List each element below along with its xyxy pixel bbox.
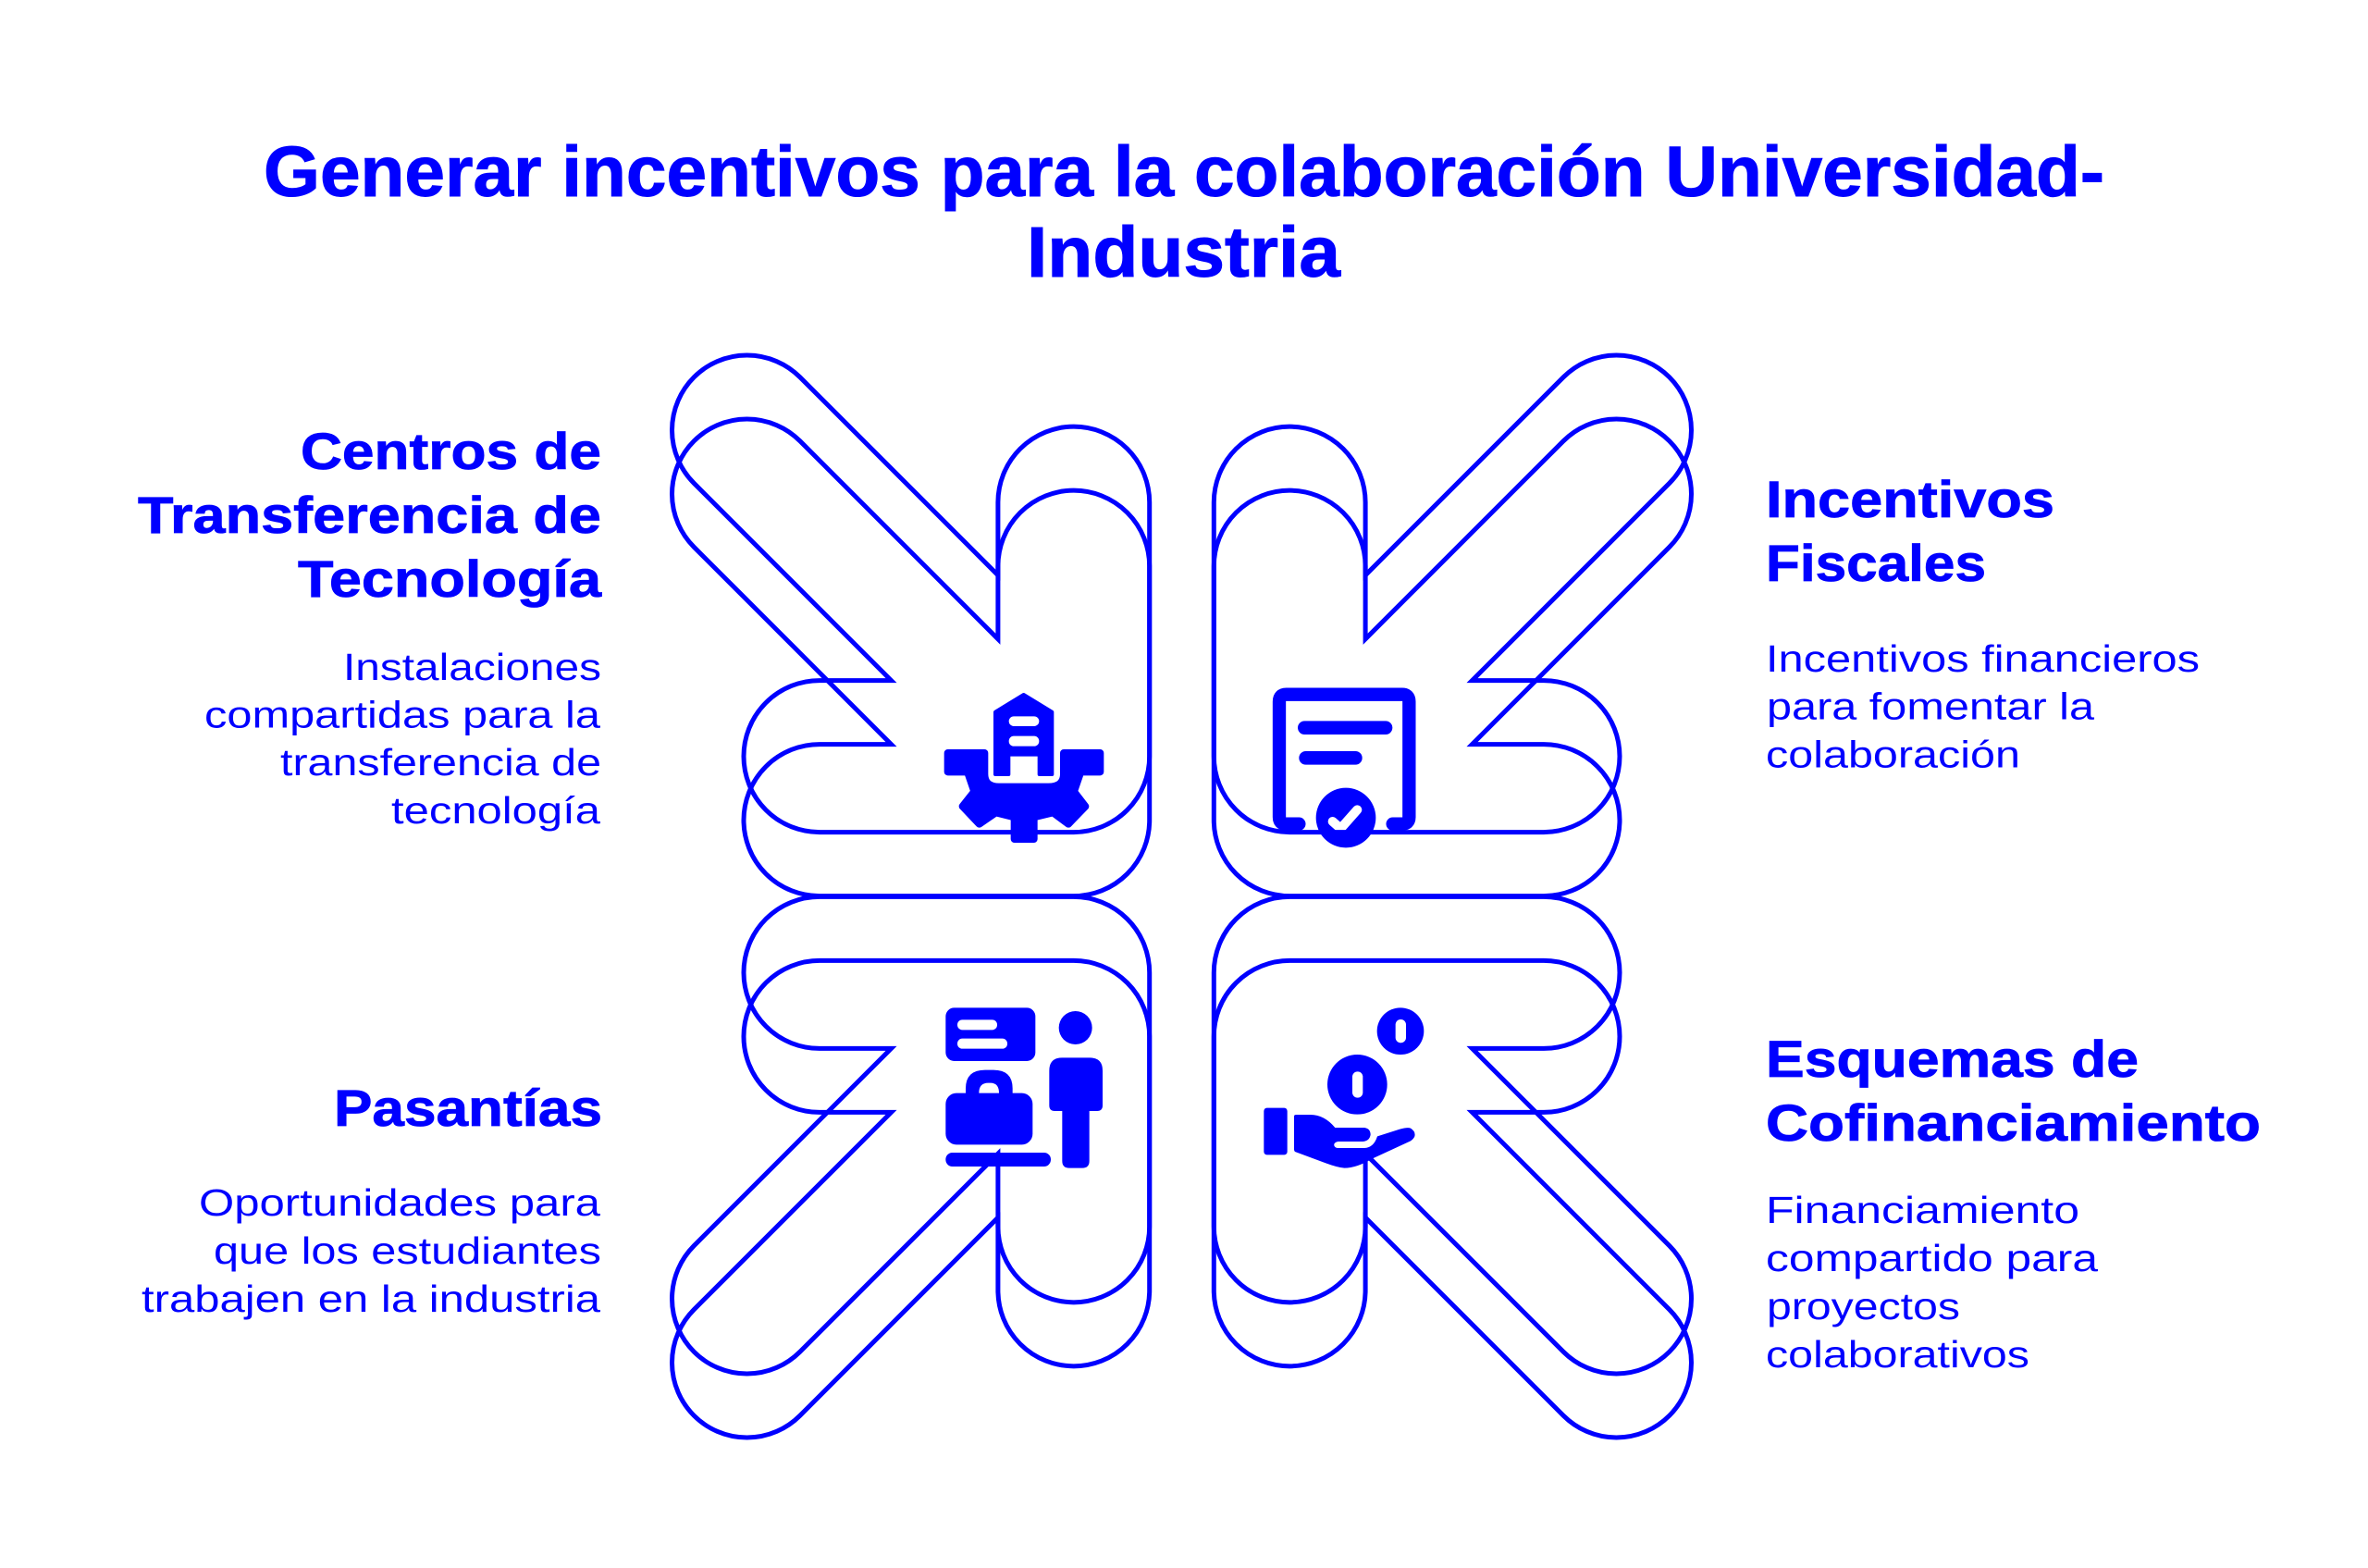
arrow outline: top-right xyxy=(1214,355,1691,896)
description: Esquemas de Cofinanciamiento: Financiamiento xyxy=(1766,1189,2079,1231)
heading: Centros de Transferencia de Tecnología xyxy=(138,422,602,608)
icon: building on gear xyxy=(948,695,1100,839)
panel: top-right arrow, Incentivos Fiscales xyxy=(1214,355,1691,896)
heading: Incentivos Fiscales: Fiscales xyxy=(1766,534,1986,592)
heading: Esquemas de Cofinanciamiento: Cofinanciamiento xyxy=(1766,1093,2261,1152)
description: Centros de Transferencia de Tecnología: compartidas para la xyxy=(204,694,600,736)
description: Esquemas de Cofinanciamiento: compartido para xyxy=(1766,1237,2098,1279)
arrow outline: bottom-right xyxy=(1214,896,1691,1438)
panel: bottom-left arrow, Pasantías xyxy=(672,896,1150,1438)
panel: bottom-right arrow, Esquemas de Cofinanciamiento xyxy=(1214,896,1691,1438)
description: Centros de Transferencia de Tecnología: transferencia de xyxy=(280,741,601,784)
heading: Incentivos Fiscales: Incentivos xyxy=(1766,470,2054,528)
heading: Incentivos Fiscales xyxy=(1766,470,2054,592)
panel: top-left arrow, Centros de Transferencia de Tecnología xyxy=(672,355,1150,896)
description: Pasantías: trabajen en la industria xyxy=(142,1278,600,1320)
description: Incentivos Fiscales: para fomentar la xyxy=(1767,685,2094,727)
heading: Centros de Transferencia de Tecnología: Transferencia de xyxy=(138,486,601,544)
heading: Pasantías: Pasantías xyxy=(334,1079,602,1137)
text block: Pasantías xyxy=(142,1079,602,1320)
description: Centros de Transferencia de Tecnología: tecnología xyxy=(391,789,600,832)
heading: Centros de Transferencia de Tecnología: Centros de xyxy=(301,422,601,480)
heading: Centros de Transferencia de Tecnología: Tecnología xyxy=(298,549,602,608)
title: Generar incentivos para la colaboración Universidad- xyxy=(264,132,2104,212)
arrow outline: bottom-left xyxy=(672,896,1150,1438)
text block: Incentivos Fiscales xyxy=(1766,470,2200,775)
text block: Centros de Transferencia de Tecnología xyxy=(138,422,602,832)
description: Esquemas de Cofinanciamiento: colaborativos xyxy=(1766,1333,2029,1376)
icon: hand with coins xyxy=(1264,1007,1424,1168)
description: Incentivos Fiscales: Incentivos financieros xyxy=(1766,637,2200,680)
arrow outline: top-left xyxy=(672,355,1150,896)
description: Pasantías xyxy=(142,1181,601,1320)
description: Centros de Transferencia de Tecnología xyxy=(204,646,601,832)
icon: card, briefcase and person xyxy=(945,1007,1103,1168)
description: Pasantías: Oportunidades para xyxy=(199,1181,600,1224)
description: Esquemas de Cofinanciamiento: proyectos xyxy=(1767,1285,1960,1327)
text block: Esquemas de Cofinanciamiento xyxy=(1766,1030,2261,1376)
heading: Esquemas de Cofinanciamiento xyxy=(1766,1030,2261,1152)
description: Esquemas de Cofinanciamiento xyxy=(1766,1189,2098,1376)
title: Industria xyxy=(1027,213,1341,292)
description: Centros de Transferencia de Tecnología: Instalaciones xyxy=(343,646,601,688)
icon: certificate with check xyxy=(1279,695,1409,847)
title xyxy=(264,132,2104,292)
heading: Esquemas de Cofinanciamiento: Esquemas de xyxy=(1766,1030,2139,1088)
description: Incentivos Fiscales: colaboración xyxy=(1766,733,2020,775)
description: Pasantías: que los estudiantes xyxy=(214,1229,601,1272)
description: Incentivos Fiscales xyxy=(1766,637,2200,775)
